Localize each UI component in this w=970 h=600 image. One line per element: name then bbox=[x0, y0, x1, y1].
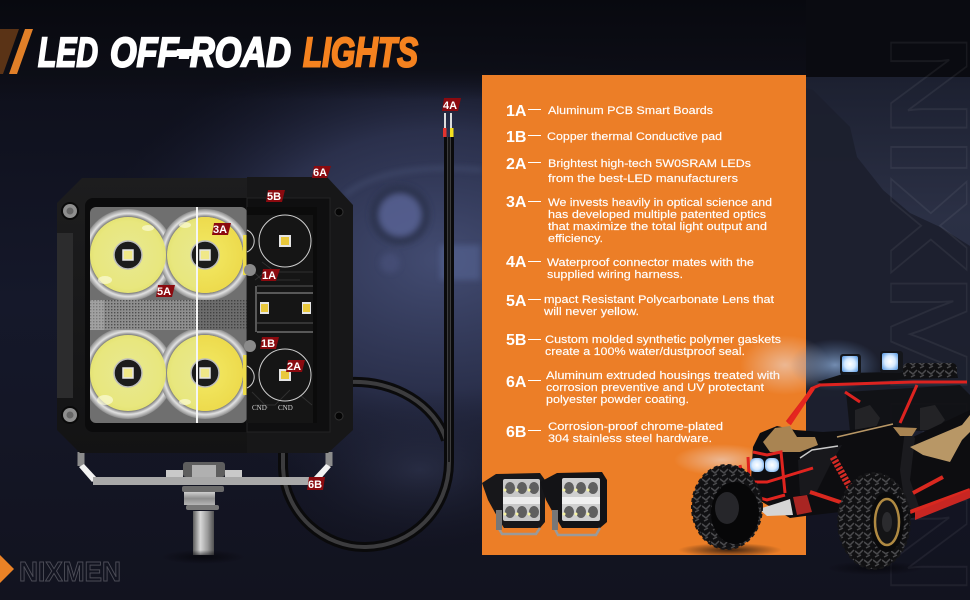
callout badges bbox=[156, 98, 461, 491]
feature 1A: 1A bbox=[506, 103, 527, 120]
feature 3A: has developed multiple patented optics bbox=[548, 209, 767, 221]
roof lights bbox=[840, 351, 903, 375]
title logo mark bbox=[0, 29, 33, 74]
feature 5B: Custom molded synthetic polymer gaskets bbox=[545, 334, 782, 346]
callout badges: 2A bbox=[287, 361, 301, 373]
feature 1A bbox=[507, 105, 713, 116]
callout badges: 6A bbox=[313, 167, 327, 179]
right half: circuit board side bbox=[244, 177, 353, 453]
roof bbox=[817, 372, 958, 384]
body bbox=[751, 424, 970, 518]
cabin and seats bbox=[846, 385, 970, 432]
feature 3A: efficiency. bbox=[548, 233, 603, 245]
bumper bbox=[740, 452, 813, 507]
lens: top left bbox=[90, 217, 166, 293]
cable bbox=[283, 137, 449, 547]
callout badges: 5A bbox=[157, 286, 171, 298]
panel: orange features bbox=[482, 75, 806, 555]
callout badges: 3A bbox=[213, 224, 227, 236]
feature 4A bbox=[506, 254, 754, 281]
feature 6A: corrosion preventive and UV protectant bbox=[546, 382, 764, 394]
wire connector tips bbox=[443, 113, 454, 137]
feature 4A: Waterproof connector mates with the bbox=[547, 257, 754, 269]
feature 6B: 304 stainless steel hardware. bbox=[548, 433, 712, 445]
feature 5A: will never yellow. bbox=[543, 306, 639, 318]
callout badges: 4A bbox=[443, 100, 457, 112]
NIXMEN logo: NIXMEN bbox=[19, 556, 121, 587]
gold panels bbox=[910, 415, 970, 462]
headlights bbox=[750, 458, 779, 472]
feature 5B: 5B bbox=[506, 332, 526, 349]
feature 6A: polyester powder coating. bbox=[546, 394, 689, 406]
skid plate bbox=[745, 497, 793, 516]
small light: right bbox=[540, 472, 607, 535]
feature 2A bbox=[506, 158, 751, 182]
feature 6A: 6A bbox=[506, 374, 527, 391]
feature 5B bbox=[506, 332, 782, 358]
feature 6B: Corrosion-proof chrome-plated bbox=[548, 421, 723, 433]
product photo: pair of lights bbox=[482, 472, 607, 535]
title: OFF-ROAD bbox=[110, 28, 291, 76]
feature 3A: We invests heavily in optical science and bbox=[548, 197, 772, 209]
NIXMEN logo bbox=[0, 555, 120, 583]
feature 2A: Brightest high-tech 5W0SRAM LEDs bbox=[548, 158, 752, 170]
title bbox=[38, 36, 419, 68]
feature 3A: that maximize the total light output and bbox=[548, 221, 767, 233]
feature 6B bbox=[506, 422, 722, 442]
wheel: rear bbox=[838, 473, 910, 569]
suspension bbox=[833, 457, 853, 493]
feature 6A: Aluminum extruded housings treated with bbox=[546, 370, 780, 382]
feature 6A bbox=[506, 370, 780, 406]
roll cage bbox=[787, 382, 967, 423]
title: LIGHTS bbox=[303, 28, 418, 76]
circuit board ground marks: CND bbox=[252, 404, 267, 412]
product photo: off-road buggy bbox=[674, 335, 970, 575]
lens: bottom middle bbox=[167, 335, 243, 411]
feature 3A: 3A bbox=[506, 194, 527, 211]
lens: top middle bbox=[167, 217, 243, 293]
feature 2A: from the best-LED manufacturers bbox=[548, 173, 739, 185]
LED light housing bbox=[57, 177, 353, 453]
lens: bottom left bbox=[90, 335, 166, 411]
feature 4A: supplied wiring harness. bbox=[547, 269, 683, 281]
feature 5A: 5A bbox=[506, 293, 527, 310]
title: LED bbox=[38, 28, 98, 76]
screws: left bbox=[61, 202, 79, 424]
callout badges: 1B bbox=[261, 338, 275, 350]
feature 2A: 2A bbox=[506, 156, 527, 173]
callout badges: 1A bbox=[262, 270, 276, 282]
feature 3A bbox=[506, 194, 772, 245]
callout badges: 5B bbox=[267, 191, 281, 203]
feature 1B: Copper thermal Conductive pad bbox=[547, 131, 722, 143]
feature 1A: Aluminum PCB Smart Boards bbox=[548, 105, 714, 117]
feature 5A: mpact Resistant Polycarbonate Lens that bbox=[544, 294, 774, 306]
lens strip bbox=[90, 300, 247, 330]
callout badges: 6B bbox=[308, 479, 322, 491]
wheel: front bbox=[692, 465, 762, 549]
left half: lit lens side bbox=[57, 178, 255, 453]
feature 5A bbox=[506, 293, 774, 318]
feature list bbox=[506, 103, 782, 445]
feature 1B: 1B bbox=[506, 129, 526, 146]
right half: circuit board side: CND bbox=[278, 404, 293, 412]
mounting bracket and bolt bbox=[79, 452, 331, 564]
feature 5B: create a 100% water/dustproof seal. bbox=[545, 346, 745, 358]
feature 6B: 6B bbox=[506, 424, 526, 441]
small light: left bbox=[482, 473, 545, 534]
feature 4A: 4A bbox=[506, 254, 527, 271]
